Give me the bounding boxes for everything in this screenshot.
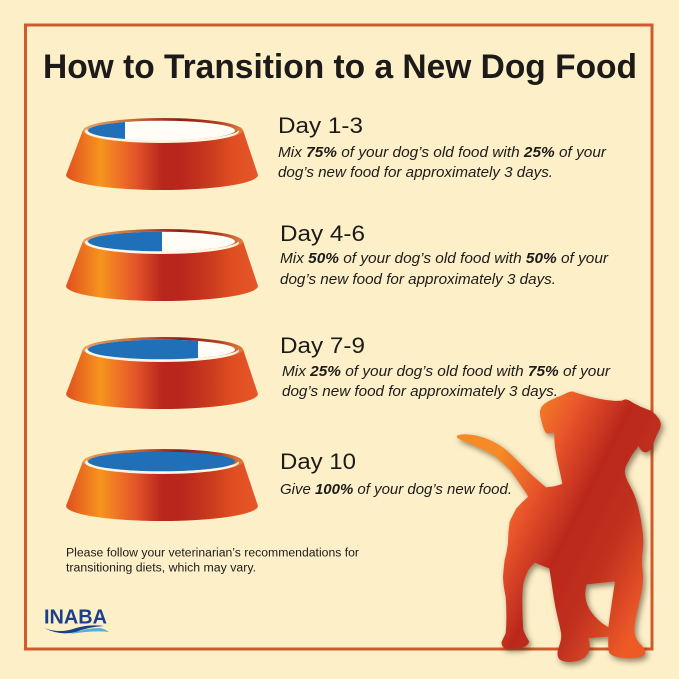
- text: day 4-6: Day 4-6: [280, 221, 365, 246]
- text: day 4-6: Mix 50% of your dog’s old food with 50% of your: [280, 250, 609, 267]
- dog silhouette: [457, 392, 661, 662]
- text: day 10: Give 100% of your dog’s new food.: [280, 481, 512, 498]
- bowl: day 10, 100% new food: [66, 449, 258, 521]
- bowl: day 1-3, 25% new food: [66, 118, 258, 190]
- text: day 10: [280, 449, 512, 498]
- logo: INABA: INABA: [44, 606, 107, 628]
- footnote: [66, 548, 359, 574]
- text: day 4-6: [280, 221, 609, 288]
- text: day 10: Day 10: [280, 449, 356, 474]
- title: How to Transition to a New Dog Food: [43, 48, 637, 86]
- text: day 1-3: [278, 113, 607, 181]
- text: day 7-9: dog’s new food for approximately 3 days.: [282, 383, 558, 400]
- text: day 7-9: [280, 333, 611, 400]
- text: day 4-6: dog’s new food for approximately 3 days.: [280, 271, 556, 288]
- text: day 1-3: Day 1-3: [278, 113, 363, 138]
- footnote: Please follow your veterinarian’s recommendations for: [66, 548, 359, 560]
- text: day 7-9: Day 7-9: [280, 333, 365, 358]
- bowl: day 4-6, 50% new food: [66, 229, 258, 301]
- text: day 1-3: dog’s new food for approximately 3 days.: [278, 164, 553, 181]
- footnote: transitioning diets, which may vary.: [66, 562, 256, 574]
- text: day 7-9: Mix 25% of your dog’s old food with 75% of your: [282, 363, 611, 380]
- bowl: day 7-9, 75% new food: [66, 337, 258, 409]
- text: day 1-3: Mix 75% of your dog’s old food with 25% of your: [278, 144, 607, 161]
